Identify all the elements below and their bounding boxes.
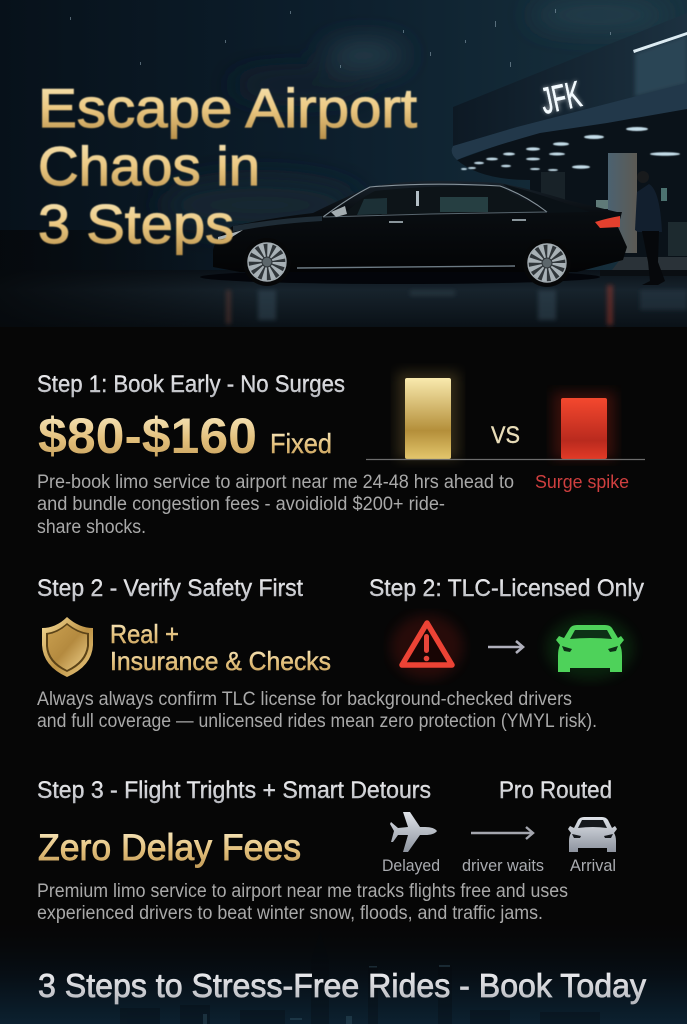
car body — [213, 181, 627, 272]
body text: step 1: Pre-book limo service to airport near me 24-48 hrs ahead to — [37, 472, 514, 493]
pillar chrome — [416, 191, 419, 206]
heading: pro routed: Pro Routed — [499, 777, 612, 804]
ceiling lights — [461, 127, 680, 171]
sidewalk — [612, 257, 687, 270]
hero photo: limo at JFK terminal — [0, 0, 687, 327]
panel: step 1 — [37, 371, 645, 538]
sill chrome — [297, 266, 515, 268]
body text: step 3: Premium limo service to airport near me tracks flights free and uses — [37, 881, 568, 902]
headlight — [218, 230, 243, 240]
route labels: driver waits — [462, 856, 544, 875]
panel: step 2 — [37, 575, 644, 732]
route labels: Arrival — [570, 856, 616, 875]
body text: step 2: Always always confirm TLC license for background-checked drivers — [37, 689, 572, 710]
body text: step 1: share shocks. — [37, 517, 146, 538]
heading: step 2 left: Step 2 - Verify Safety First — [37, 575, 303, 602]
safety callout — [110, 619, 331, 676]
JFK sign — [537, 73, 585, 122]
roof light strip — [633, 32, 687, 53]
fixed label: Fixed — [270, 428, 332, 459]
rear wheel — [523, 239, 571, 287]
storm clouds — [160, 3, 670, 231]
JFK sign: JFK — [537, 73, 585, 122]
limousine — [200, 181, 627, 287]
arrow: delayed to arrival — [471, 827, 533, 839]
left vignette — [0, 230, 260, 327]
interior details — [541, 172, 565, 214]
heading: step 3: Step 3 - Flight Trights + Smart Detours — [37, 777, 431, 804]
icon: plane — [390, 812, 437, 852]
body text: step 1: and bundle congestion fees - avoidiold $200+ ride- — [37, 494, 445, 515]
terminal building — [452, 13, 687, 276]
night sky — [0, 0, 687, 327]
price: $80-$160 — [38, 408, 257, 464]
title: 3 Steps — [38, 193, 234, 255]
canopy band — [452, 83, 687, 160]
body sheen — [233, 216, 322, 232]
body text: step 2: and full coverage — unlicensed rides mean zero protection (YMYL risk). — [37, 711, 597, 732]
title: Escape Airport — [38, 77, 417, 139]
icon: red warning triangle — [391, 615, 463, 679]
door handles — [389, 221, 403, 223]
car shadow — [200, 270, 600, 284]
heading: step 1: Step 1: Book Early - No Surges — [37, 371, 345, 398]
roof chrome — [323, 184, 547, 217]
main column — [608, 153, 637, 253]
title: Chaos in — [38, 135, 260, 197]
body text: step 2 — [37, 689, 597, 732]
icon: gold shield — [42, 617, 93, 677]
icon: green car — [546, 616, 634, 680]
route labels — [382, 856, 616, 875]
facade wall — [453, 13, 687, 146]
JFK sign: JFK — [537, 73, 585, 122]
safety callout: Real + — [110, 619, 179, 649]
bar chart: fixed vs surge — [366, 372, 645, 492]
mirror — [331, 206, 347, 217]
route labels: Delayed — [382, 856, 440, 875]
zero delay fees: Zero Delay Fees — [38, 827, 301, 868]
rear window — [503, 184, 590, 213]
safety callout: Insurance & Checks — [110, 646, 331, 676]
icon: grey car — [568, 817, 617, 852]
facade light wash — [635, 35, 687, 97]
skyline backdrop — [0, 920, 687, 1024]
bar chart: fixed vs surge: Surge spike — [535, 472, 629, 492]
heading: step 2 right: Step 2: TLC-Licensed Only — [369, 575, 644, 602]
rain — [70, 9, 611, 68]
footer call to action: 3 Steps to Stress-Free Rides - Book Today — [38, 967, 646, 1004]
ground — [0, 270, 687, 327]
wet ground reflections — [226, 285, 687, 325]
front wheel — [243, 238, 291, 286]
arrow: warning to licensed car — [488, 641, 523, 653]
body text: step 3 — [37, 881, 568, 924]
panel: step 3 — [37, 777, 617, 924]
standing chauffeur — [635, 171, 665, 285]
bar chart: fixed vs surge: VS — [491, 422, 520, 449]
body text: step 1 — [37, 472, 514, 538]
belt line — [323, 212, 547, 217]
canopy ceiling and interior — [457, 105, 687, 258]
body text: step 3: experienced drivers to beat winter snow, floods, and traffic jams. — [37, 903, 543, 924]
tail light — [595, 216, 620, 228]
title — [38, 77, 417, 255]
glass — [343, 186, 543, 215]
